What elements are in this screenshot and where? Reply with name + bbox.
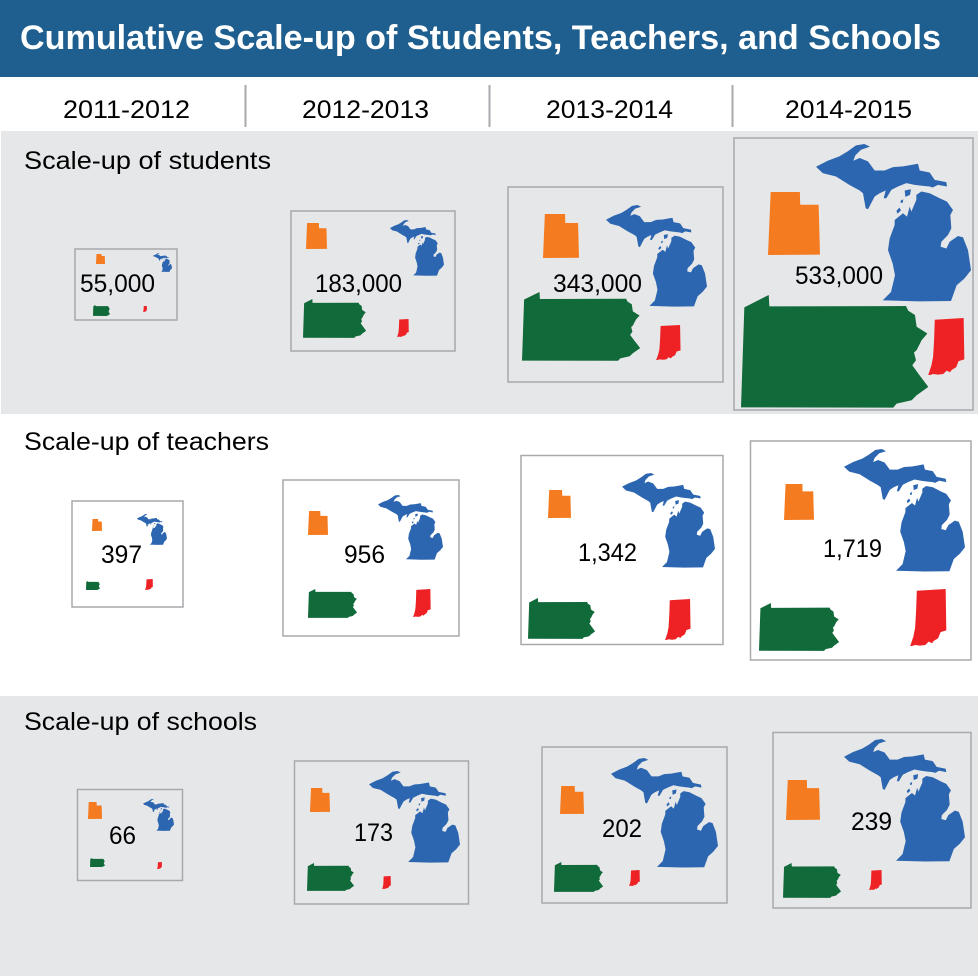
map box: schools 2014-2015: [773, 732, 971, 908]
map box: students 2013-2014: [508, 187, 723, 382]
title banner: Cumulative Scale-up of Students, Teachers, and Schools: [20, 19, 941, 57]
map box: teachers 2014-2015: 1,719: [823, 535, 882, 563]
map box: teachers 2014-2015: [750, 441, 971, 660]
heading: schools: Scale-up of schools: [24, 708, 257, 736]
panel: scale-up of schools: [0, 696, 978, 976]
year header row: [63, 85, 912, 127]
map box: teachers 2013-2014: [521, 456, 723, 644]
map box: schools 2012-2013: [294, 761, 468, 904]
year header row: 2012-2013: [302, 96, 429, 124]
year header row: 2013-2014: [546, 96, 673, 124]
map box: schools 2012-2013: 173: [354, 819, 393, 847]
map box: students 2014-2015: 533,000: [795, 262, 883, 290]
heading: teachers: Scale-up of teachers: [24, 428, 269, 456]
year header row: 2011-2012: [63, 96, 190, 124]
map box: students 2014-2015: [734, 138, 973, 410]
map box: schools 2011-2012: 66: [109, 822, 136, 850]
map box: schools 2013-2014: 202: [602, 815, 642, 843]
year header row: 2014-2015: [785, 96, 912, 124]
heading: students: Scale-up of students: [24, 147, 271, 175]
title banner: [0, 0, 978, 77]
panel: scale-up of students: [1, 131, 978, 414]
panel: scale-up of teachers: [0, 414, 978, 696]
map box: teachers 2011-2012: [72, 501, 183, 607]
map box: teachers 2011-2012: 397: [101, 541, 142, 569]
map box: teachers 2013-2014: 1,342: [578, 539, 637, 567]
map box: students 2011-2012: 55,000: [80, 270, 155, 298]
map box: students 2012-2013: 183,000: [315, 270, 402, 298]
map box: students 2011-2012: [75, 249, 177, 320]
map box: schools 2013-2014: [542, 747, 727, 903]
map box: students 2012-2013: [291, 211, 455, 351]
map box: teachers 2012-2013: 956: [344, 541, 385, 569]
map box: schools 2011-2012: [78, 790, 182, 880]
map box: teachers 2012-2013: [283, 480, 459, 636]
map box: students 2013-2014: 343,000: [553, 270, 642, 298]
map box: schools 2014-2015: 239: [851, 808, 892, 836]
